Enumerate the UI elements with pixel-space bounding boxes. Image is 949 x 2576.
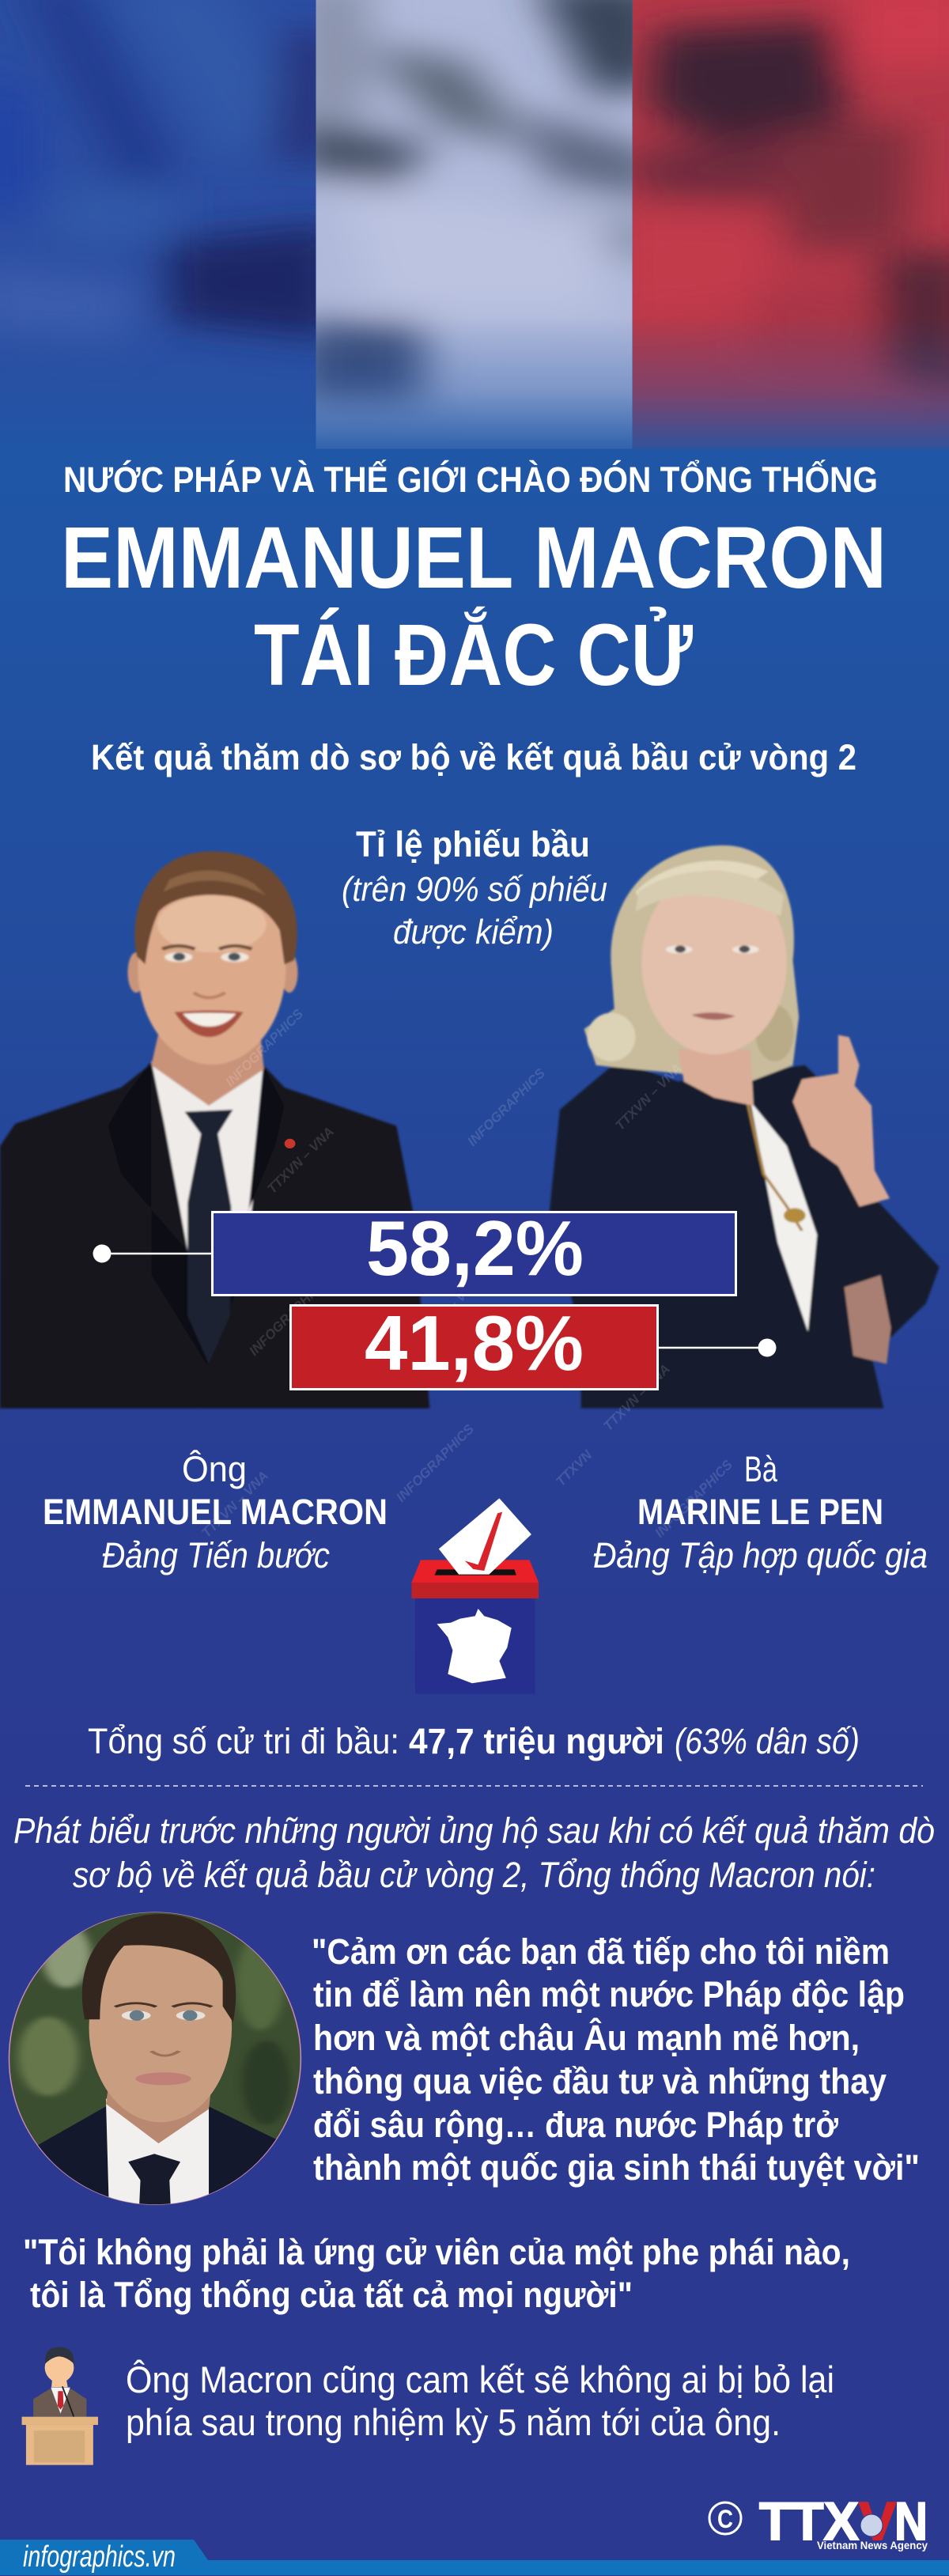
- quote 1: thông qua việc đầu tư và những thay: [313, 2061, 887, 2101]
- watermarks: INFOGRAPHICS: [393, 1421, 477, 1505]
- watermarks: TTXVN – VNA: [600, 1361, 673, 1434]
- logo: TTXVN copyright: C: [717, 2505, 733, 2533]
- quote 2: tôi là Tổng thống của tất cả mọi người": [30, 2275, 633, 2315]
- quote 1: hơn và một châu Âu mạnh mẽ hơn,: [313, 2018, 860, 2058]
- speech intro: [13, 1810, 935, 1895]
- candidate label: Macron: Đảng Tiến bước: [102, 1535, 330, 1575]
- watermarks: TTXVN – VNA: [612, 1061, 685, 1133]
- candidate label: Le Pen: MARINE LE PEN: [637, 1492, 883, 1532]
- circular photo of Macron: [0, 1908, 315, 2209]
- watermarks: TTXVN – VNA: [198, 1468, 271, 1541]
- icon: ballot box: [411, 1498, 539, 1694]
- kicker heading: NƯỚC PHÁP VÀ THẾ GIỚI CHÀO ĐÓN TỔNG THỐNG: [63, 460, 878, 500]
- Macron result bar: 58,2%: [366, 1205, 584, 1292]
- quote 1: [312, 1931, 920, 2188]
- logo: TTXVN copyright: TTX: [759, 2491, 859, 2551]
- vote share label: (trên 90% số phiếu: [342, 870, 607, 909]
- footer band: [0, 2540, 949, 2575]
- watermarks: TTXVN – VNA: [410, 1274, 483, 1347]
- portrait: Marine Le Pen: [550, 845, 940, 1409]
- watermarks: INFOGRAPHICS: [652, 1457, 735, 1541]
- quote 2: [23, 2232, 850, 2315]
- watermarks: INFOGRAPHICS: [246, 1275, 330, 1359]
- vote share label: [342, 824, 607, 951]
- watermarks: INFOGRAPHICS: [464, 1065, 548, 1149]
- watermarks: INFOGRAPHICS: [222, 1006, 306, 1090]
- logo: TTXVN copyright: N: [894, 2491, 928, 2551]
- quote 1: đổi sâu rộng… đưa nước Pháp trở: [313, 2105, 838, 2145]
- main title line 2: TÁI ĐẮC CỬ: [254, 607, 694, 704]
- watermarks: INFOGRAPHICS: [608, 1209, 692, 1293]
- candidate label: Le Pen: Bà: [744, 1449, 778, 1489]
- watermarks: TTXVN – VNA: [264, 1124, 337, 1197]
- logo: TTXVN copyright: Vietnam News Agency: [817, 2539, 928, 2551]
- candidate label: Macron: EMMANUEL MACRON: [43, 1492, 388, 1532]
- turnout stat: [88, 1721, 860, 1761]
- footer site name: infographics.vn: [23, 2540, 176, 2574]
- french flag banner: [0, 0, 949, 449]
- quote 1: "Cảm ơn các bạn đã tiếp cho tôi niềm: [312, 1931, 890, 1972]
- logo: TTXVN copyright: [709, 2491, 928, 2551]
- watermarks: [198, 1006, 735, 1541]
- closing pledge text: [126, 2358, 834, 2443]
- candidate label: Le Pen: [593, 1449, 928, 1575]
- quote 2: "Tôi không phải là ứng cử viên của một phe phái nào,: [23, 2232, 850, 2272]
- turnout stat: (63% dân số): [675, 1721, 860, 1761]
- turnout stat: 47,7 triệu người: [409, 1721, 664, 1761]
- portrait: Emmanuel Macron: [0, 852, 429, 1409]
- closing pledge text: Ông Macron cũng cam kết sẽ không ai bị bỏ lại: [126, 2358, 834, 2400]
- quote 1: tin để làm nên một nước Pháp độc lập: [313, 1974, 905, 2014]
- Le Pen result bar: 41,8%: [365, 1299, 584, 1386]
- Macron result bar: [93, 1205, 735, 1296]
- icon: speaker at podium: [22, 2347, 98, 2465]
- candidate label: Macron: [43, 1449, 388, 1575]
- Le Pen result bar: [291, 1299, 777, 1389]
- closing pledge text: phía sau trong nhiệm kỳ 5 năm tới của ông.: [126, 2401, 781, 2443]
- candidate label: Macron: Ông: [182, 1449, 247, 1489]
- turnout stat: Tổng số cử tri đi bầu:: [88, 1721, 399, 1761]
- logo: TTXVN copyright: V: [859, 2491, 896, 2551]
- vote share label: Tỉ lệ phiếu bầu: [356, 824, 590, 864]
- speech intro: sơ bộ về kết quả bầu cử vòng 2, Tổng thống Macron nói:: [73, 1855, 875, 1895]
- vote share label: được kiểm): [393, 913, 554, 951]
- subtitle: Kết quả thăm dò sơ bộ về kết quả bầu cử vòng 2: [91, 737, 856, 777]
- watermarks: TTXVN: [553, 1447, 595, 1489]
